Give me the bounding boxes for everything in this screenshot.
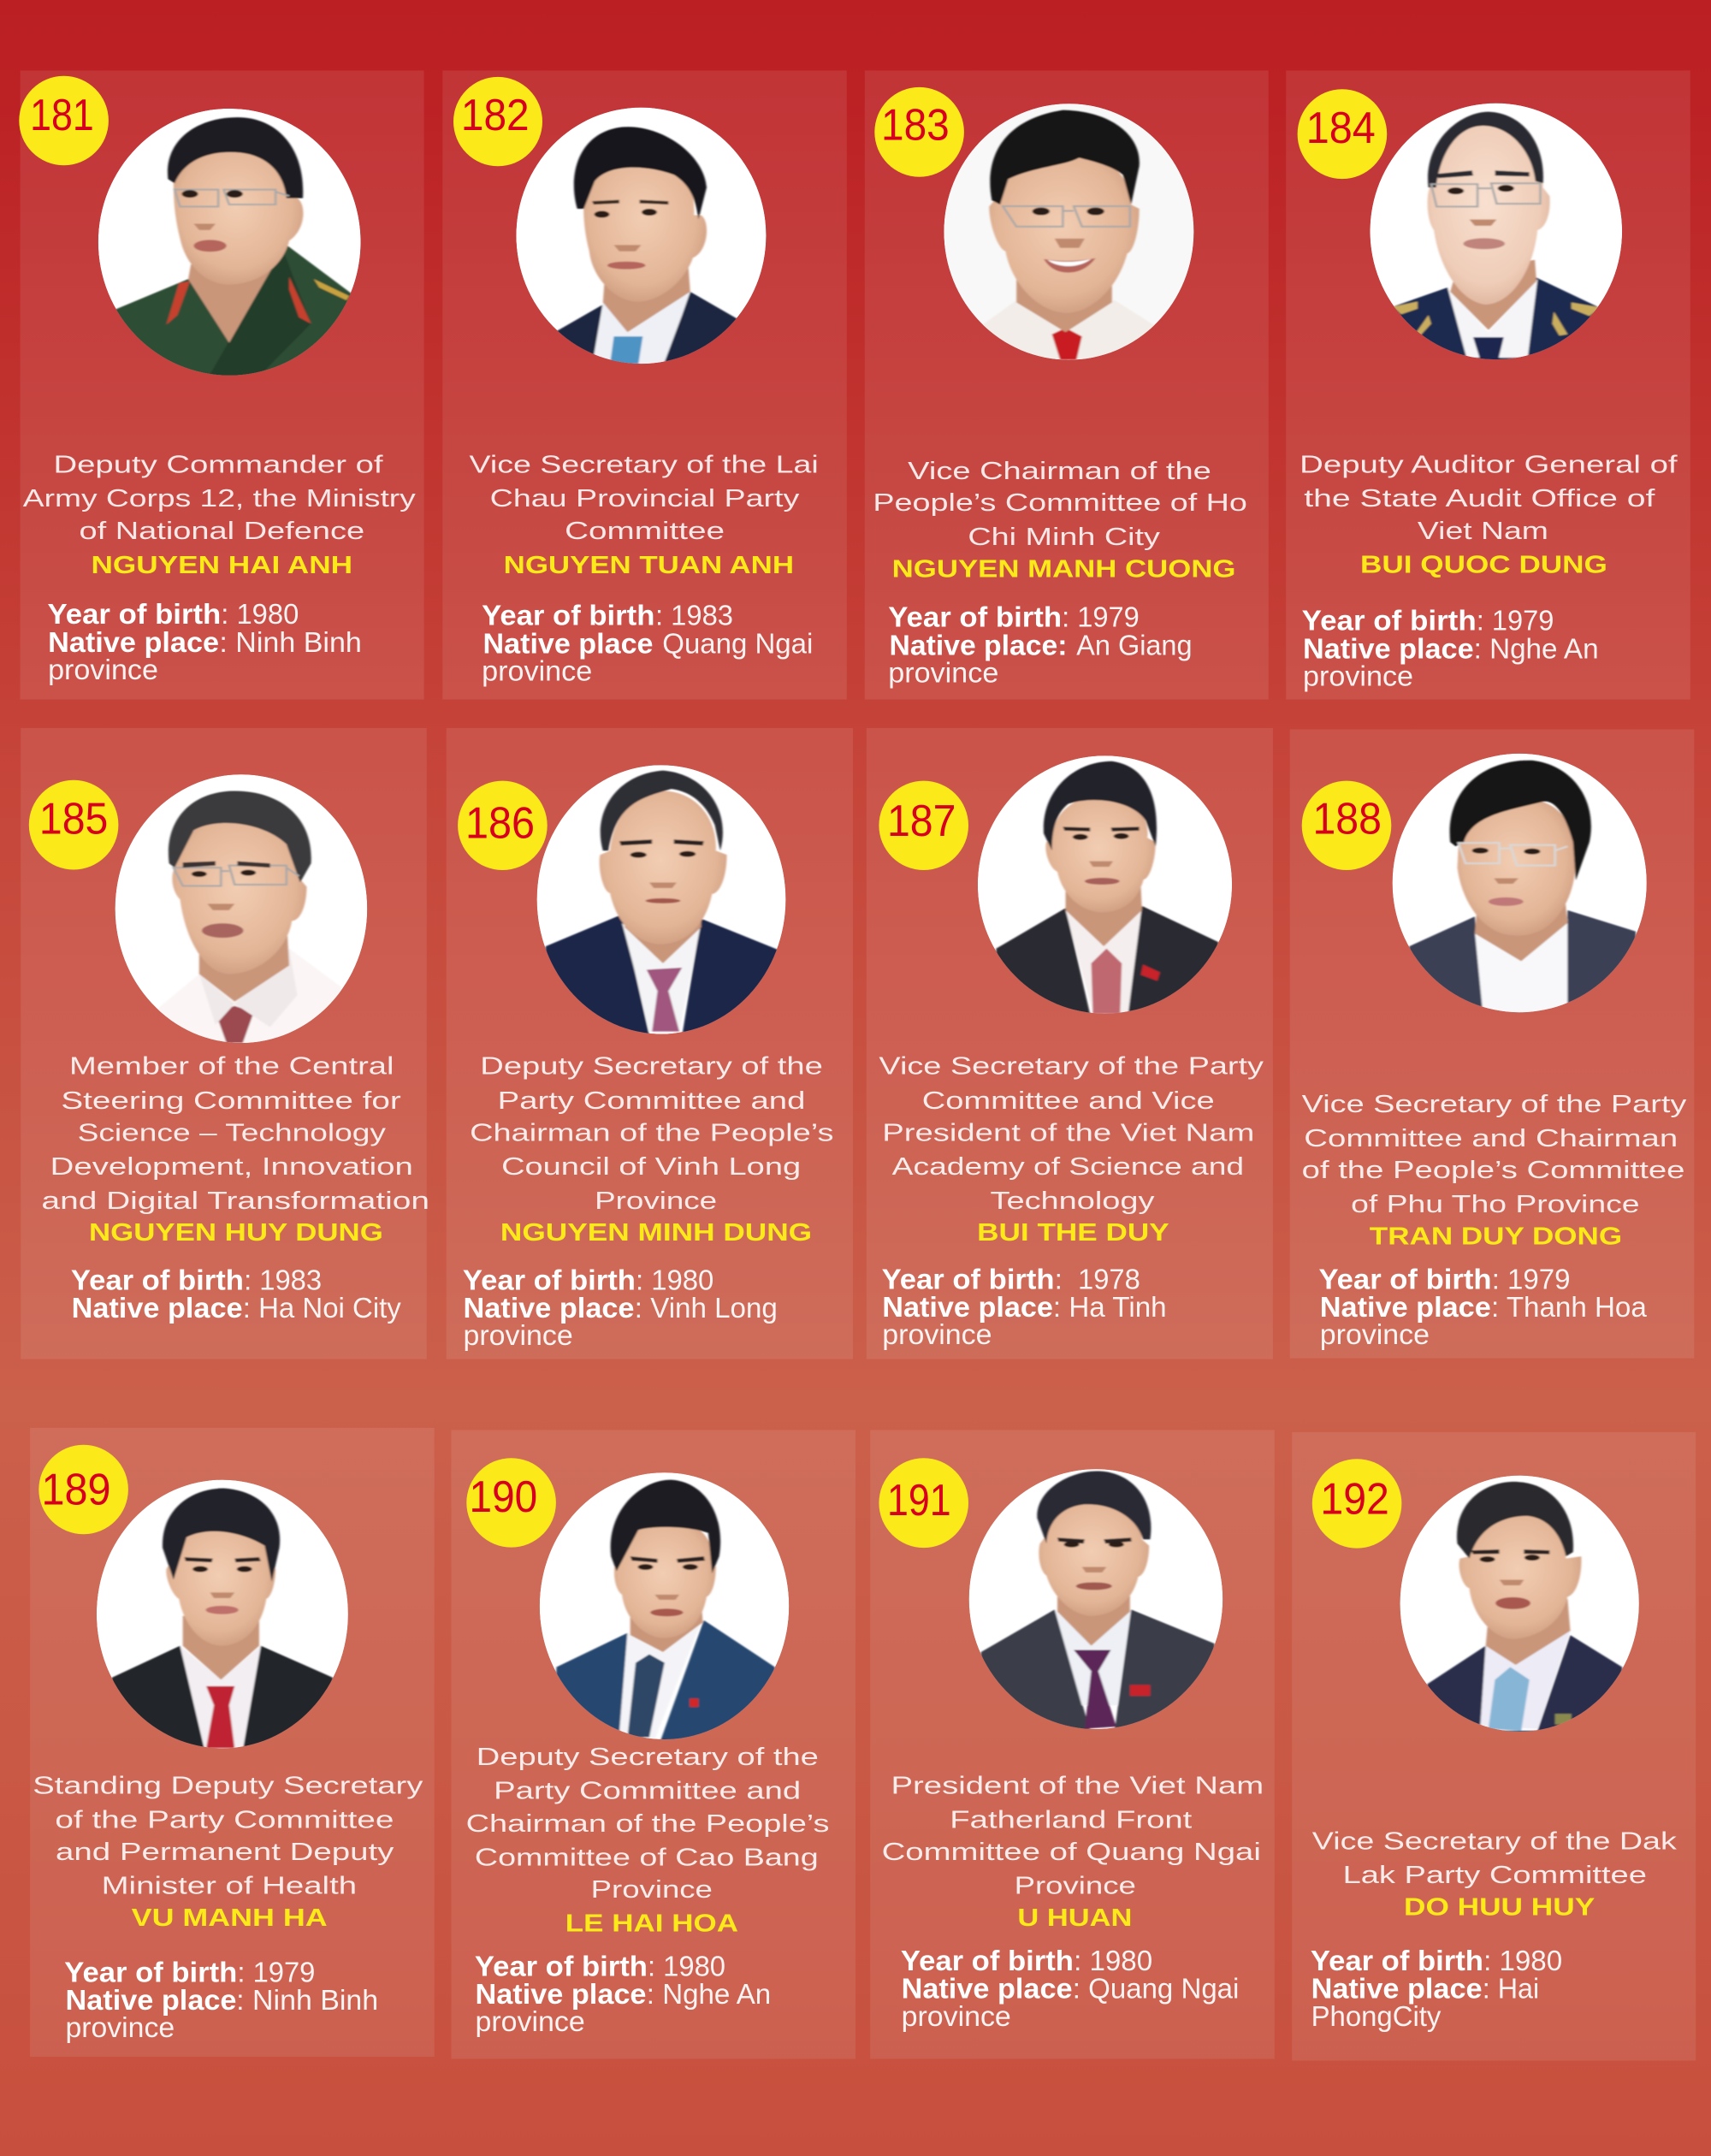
position title: Vice Secretary of the Party: [1302, 1091, 1687, 1118]
position title: Development, Innovation: [50, 1153, 413, 1181]
position title: President of the Viet Nam: [891, 1773, 1264, 1800]
birth year and native place: [1319, 1263, 1647, 1350]
name: NGUYEN HUY DUNG: [89, 1219, 383, 1247]
card background: [30, 1428, 435, 2057]
name: NGUYEN MINH DUNG: [500, 1219, 812, 1247]
position title: Committee of Cao Bang: [475, 1845, 819, 1872]
portrait photo: [1400, 1476, 1639, 1738]
birth year and native place: An Giang: [1076, 629, 1193, 660]
position title: [882, 1773, 1264, 1900]
name: BUI THE DUY: [977, 1219, 1169, 1247]
birth year and native place: Year of birth: [463, 1265, 636, 1295]
number badge: 189: [41, 1465, 111, 1514]
number badge: [29, 780, 118, 869]
position title: Chi Minh City: [968, 524, 1161, 551]
birth year and native place: Year of birth: [71, 1265, 244, 1295]
card background: [452, 1430, 856, 2058]
position title: Committee and Vice: [922, 1087, 1215, 1115]
birth year and native place: [64, 1956, 378, 2043]
birth year and native place: province: [1320, 1318, 1430, 1350]
birth year and native place: province: [464, 1319, 573, 1351]
card background: [1286, 70, 1690, 700]
number badge: 188: [1312, 794, 1382, 844]
card background: [21, 70, 424, 700]
position title: [466, 1744, 830, 1904]
panel: 185 Nguyen Huy Dung: [21, 728, 429, 1359]
number badge: 185: [39, 794, 108, 844]
birth year and native place: Native place: [1320, 1291, 1491, 1323]
number badge: [19, 76, 109, 165]
number badge: 186: [465, 798, 535, 848]
number badge: 190: [469, 1472, 537, 1522]
portrait photo: [115, 774, 367, 1051]
name: VU MANH HA: [132, 1904, 328, 1932]
panel: 192 Do Huu Huy: [1292, 1432, 1696, 2060]
birth year and native place: : Ninh Binh: [236, 1984, 378, 2016]
position title: Province: [1015, 1873, 1136, 1900]
position title: [469, 451, 819, 545]
birth year and native place: : Ninh Binh: [219, 626, 362, 658]
position title: [1302, 1091, 1687, 1218]
birth year and native place: : Ha Noi City: [243, 1292, 401, 1324]
birth year and native place: [1311, 1945, 1562, 2032]
position title: Deputy Commander of: [53, 451, 384, 478]
card background: [867, 728, 1273, 1359]
number badge: [458, 781, 548, 870]
number badge: [874, 87, 964, 177]
birth year and native place: Native place: [1303, 632, 1474, 664]
number badge: [453, 77, 542, 166]
birth year and native place: : 1980: [636, 1265, 713, 1295]
birth year and native place: province: [882, 1318, 992, 1350]
position title: Vice Secretary of the Lai: [469, 451, 819, 478]
birth year and native place: : Vinh Long: [635, 1292, 778, 1324]
position title: Party Committee and: [494, 1778, 801, 1805]
position title: Committee: [565, 518, 725, 545]
panel: 187 Bui The Duy: [867, 728, 1273, 1359]
number badge: [1298, 89, 1387, 179]
position title: Party Committee and: [498, 1087, 805, 1115]
birth year and native place: Quang Ngai: [662, 627, 813, 659]
birth year and native place: : Hai: [1483, 1972, 1539, 2004]
position title: Vice Secretary of the Party: [879, 1052, 1264, 1080]
birth year and native place: [482, 599, 813, 687]
number badge: [879, 781, 968, 870]
position title: Vice Secretary of the Dak: [1312, 1827, 1677, 1855]
number badge: [1302, 781, 1391, 870]
birth year and native place: : 1983: [244, 1265, 322, 1295]
position title: Steering Committee for: [61, 1087, 401, 1115]
position title: Chau Provincial Party: [490, 485, 800, 512]
number badge: [466, 1458, 556, 1548]
birth year and native place: province: [902, 2000, 1011, 2032]
position title: People’s Committee of Ho: [873, 489, 1247, 517]
birth year and native place: Year of birth: [482, 599, 654, 631]
birth year and native place: province: [482, 655, 592, 687]
birth year and native place: Native place: [476, 1978, 647, 2010]
birth year and native place: : 1980: [648, 1951, 725, 1982]
birth year and native place: Year of birth: [1302, 604, 1477, 637]
name: BUI QUOC DUNG: [1360, 551, 1607, 578]
card background: [21, 728, 427, 1359]
position title: Deputy Secretary of the: [477, 1744, 819, 1771]
birth year and native place: [888, 601, 1193, 689]
panel: 191 U Huan: [870, 1430, 1275, 2058]
position title: Province: [595, 1188, 717, 1215]
birth year and native place: : 1983: [655, 599, 733, 631]
card background: [1290, 729, 1694, 1359]
position title: [33, 1773, 423, 1900]
birth year and native place: Native place: [65, 1984, 236, 2016]
birth year and native place: : 1980: [221, 598, 299, 630]
birth year and native place: [901, 1945, 1239, 2032]
birth year and native place: [475, 1951, 771, 2037]
position title: Council of Vinh Long: [501, 1153, 801, 1181]
birth year and native place: [463, 1265, 778, 1351]
birth year and native place: : 1979: [237, 1956, 315, 1988]
position title: Lak Party Committee: [1343, 1862, 1647, 1889]
birth year and native place: : Thanh Hoa: [1491, 1291, 1647, 1323]
position title: Member of the Central: [69, 1052, 394, 1080]
position title: Deputy Auditor General of: [1300, 451, 1678, 478]
birth year and native place: : Quang Ngai: [1073, 1972, 1239, 2004]
number badge: 183: [881, 101, 950, 151]
name: TRAN DUY DONG: [1370, 1223, 1622, 1250]
position title: [879, 1052, 1264, 1215]
position title: Viet Nam: [1418, 518, 1548, 545]
number badge: 191: [887, 1476, 951, 1525]
name: U HUAN: [1017, 1904, 1132, 1932]
position title: the State Audit Office of: [1304, 485, 1656, 512]
position title: [1300, 451, 1678, 545]
position title: Academy of Science and: [892, 1153, 1244, 1181]
name: NGUYEN MANH CUONG: [892, 555, 1235, 583]
portrait photo: [540, 1472, 789, 1745]
birth year and native place: [1302, 604, 1599, 692]
card background: [442, 70, 847, 700]
birth year and native place: : Nghe An: [647, 1978, 771, 2010]
position title: [41, 1052, 429, 1215]
birth year and native place: : 1979: [1062, 601, 1140, 633]
position title: Deputy Secretary of the: [480, 1052, 823, 1080]
position title: of the Party Committee: [55, 1807, 394, 1834]
birth year and native place: [882, 1263, 1167, 1350]
birth year and native place: Native place: [483, 627, 654, 659]
position title: Province: [591, 1876, 713, 1904]
portrait photo: [97, 1480, 348, 1752]
position title: of the People’s Committee: [1302, 1157, 1684, 1184]
birth year and native place: Year of birth: [48, 598, 221, 630]
birth year and native place: province: [48, 654, 158, 685]
birth year and native place: Year of birth: [882, 1263, 1055, 1295]
panel: 184 Bui Quoc Dung: [1286, 70, 1690, 700]
card background: [865, 70, 1269, 700]
position title: Chairman of the People’s: [466, 1810, 830, 1838]
panel: 188 Tran Duy Dong: [1290, 729, 1694, 1359]
portrait photo: [969, 1469, 1223, 1733]
number badge: [38, 1445, 128, 1534]
birth year and native place: Year of birth: [1319, 1263, 1492, 1295]
number badge: [1312, 1459, 1401, 1549]
birth year and native place: Native place: [72, 1292, 243, 1324]
position title: Chairman of the People’s: [470, 1119, 833, 1146]
position title: Science – Technology: [78, 1119, 387, 1146]
birth year and native place: [48, 598, 362, 685]
position title: [23, 451, 416, 545]
birth year and native place: : Ha Tinh: [1053, 1291, 1167, 1323]
panel: 189 Vu Manh Ha: [30, 1428, 435, 2057]
birth year and native place: : 1979: [1477, 604, 1554, 637]
panel: 186 Nguyen Minh Dung: [447, 728, 853, 1359]
birth year and native place: Year of birth: [64, 1956, 237, 1988]
number badge: 187: [887, 797, 956, 846]
birth year and native place: : 1980: [1483, 1945, 1562, 1976]
portrait photo: [98, 109, 365, 388]
position title: Fatherland Front: [950, 1807, 1192, 1834]
birth year and native place: Year of birth: [888, 601, 1062, 633]
birth year and native place: [71, 1265, 401, 1324]
birth year and native place: province: [476, 2005, 585, 2037]
birth year and native place: Native place: [464, 1292, 635, 1324]
portrait photo: [978, 755, 1232, 1016]
card background: [1292, 1432, 1696, 2060]
position title: and Digital Transformation: [41, 1188, 429, 1215]
birth year and native place: Native place: [48, 626, 219, 658]
name: DO HUU HUY: [1404, 1893, 1595, 1921]
birth year and native place: : 1979: [1492, 1263, 1571, 1295]
number badge: [879, 1458, 968, 1548]
birth year and native place: Year of birth: [475, 1951, 648, 1982]
name: NGUYEN TUAN ANH: [504, 552, 794, 579]
position title: [1312, 1827, 1677, 1889]
panel: 182 Nguyen Tuan Anh: [442, 70, 847, 700]
name: LE HAI HOA: [565, 1910, 738, 1937]
birth year and native place: Native place:: [890, 629, 1068, 660]
birth year and native place: province: [65, 2011, 175, 2043]
birth year and native place: Year of birth: [901, 1945, 1074, 1976]
position title: [470, 1052, 833, 1215]
position title: Minister of Health: [102, 1873, 357, 1900]
position title: and Permanent Deputy: [56, 1839, 394, 1866]
birth year and native place: Native place: [882, 1291, 1053, 1323]
position title: of Phu Tho Province: [1351, 1191, 1639, 1218]
birth year and native place: Native place: [902, 1972, 1073, 2004]
number badge: 192: [1320, 1474, 1389, 1524]
portrait photo: [516, 108, 766, 369]
birth year and native place: Native place: [1311, 1972, 1483, 2004]
portrait photo: [944, 104, 1193, 364]
position title: Committee of Quang Ngai: [882, 1839, 1261, 1866]
position title: Vice Chairman of the: [908, 458, 1211, 485]
birth year and native place: : 1980: [1074, 1945, 1152, 1976]
birth year and native place: province: [888, 657, 998, 689]
birth year and native place: : Nghe An: [1474, 632, 1599, 664]
number badge: 184: [1306, 104, 1376, 153]
position title: Committee and Chairman: [1304, 1125, 1678, 1152]
portrait photo: [537, 765, 785, 1038]
card background: [447, 728, 853, 1359]
number badge: 181: [30, 91, 94, 140]
name: NGUYEN HAI ANH: [91, 552, 352, 579]
panel: 183 Nguyen Manh Cuong: [865, 70, 1269, 700]
number badge: 182: [461, 91, 530, 140]
position title: of National Defence: [79, 518, 364, 545]
position title: President of the Viet Nam: [882, 1119, 1254, 1146]
birth year and native place: province: [1303, 660, 1413, 692]
position title: Standing Deputy Secretary: [33, 1773, 423, 1800]
position title: Army Corps 12, the Ministry: [23, 485, 416, 512]
birth year and native place: Year of birth: [1311, 1945, 1483, 1976]
position title: [873, 458, 1247, 551]
birth year and native place: : 1978: [1055, 1263, 1140, 1295]
portrait photo: [1370, 104, 1622, 362]
panel: 181 Nguyen Hai Anh: [19, 70, 424, 700]
panel: 190 Le Hai Hoa: [452, 1430, 856, 2058]
card background: [870, 1430, 1275, 2058]
portrait photo: [1393, 754, 1647, 1016]
birth year and native place: PhongCity: [1311, 2000, 1442, 2032]
position title: Technology: [991, 1188, 1155, 1215]
